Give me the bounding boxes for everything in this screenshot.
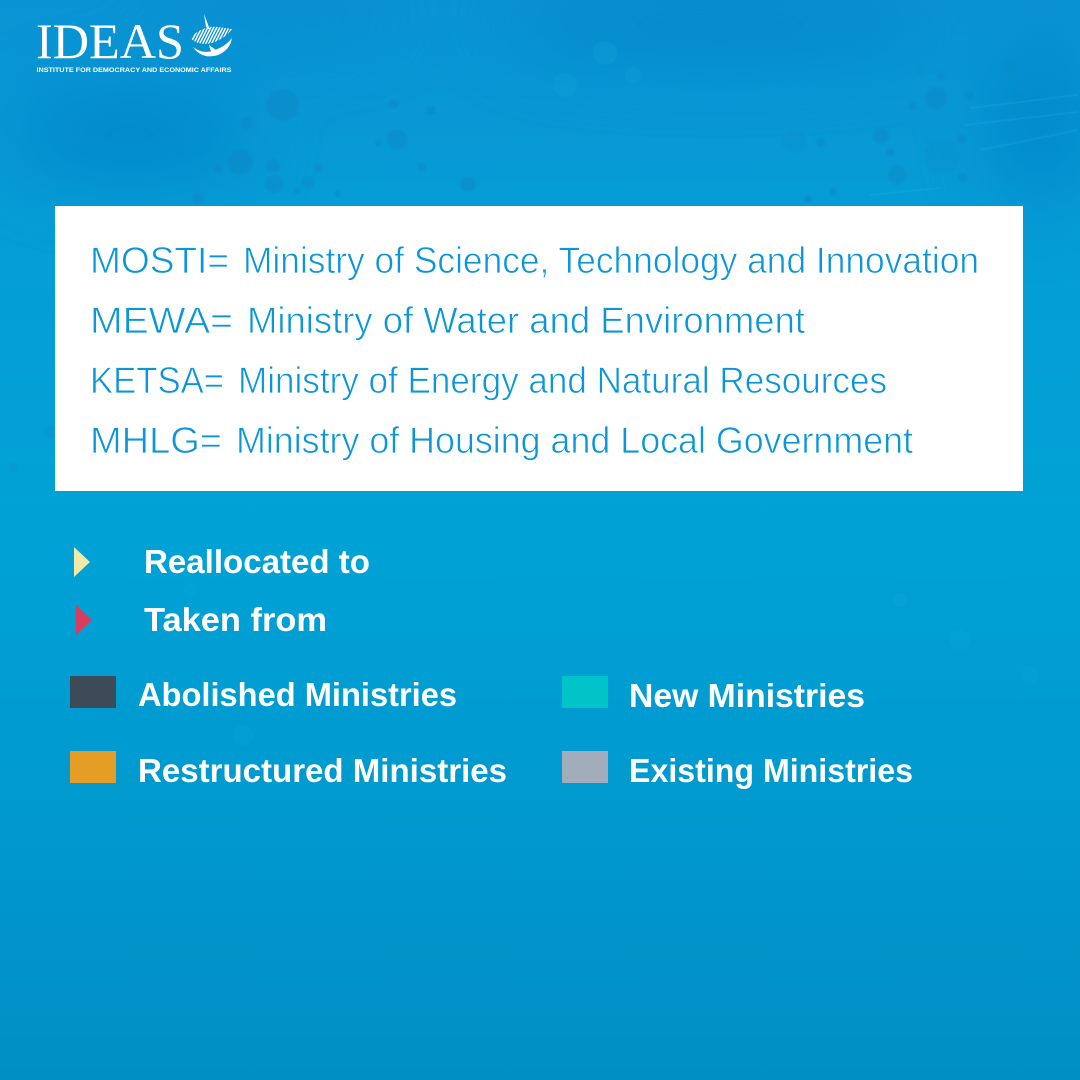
legend: abolished ministries: Abolished Ministries (138, 676, 457, 713)
abbreviation: MHLG: MHLG= (90, 420, 222, 461)
abbreviation: MOSTI: Ministry of Science, Technology and Innovation (243, 240, 979, 281)
legend: taken from (76, 601, 327, 638)
abbreviation: KETSA: Ministry of Energy and Natural Resources (238, 360, 887, 401)
legend: taken from: Taken from (144, 601, 327, 638)
logo wordmark: IDEAS (36, 13, 184, 69)
panel: abbreviations (55, 206, 1023, 491)
legend: new ministries: New Ministries (629, 677, 865, 714)
abbreviation: MHLG: Ministry of Housing and Local Government (236, 420, 914, 461)
legend: existing ministries: Existing Ministries (629, 752, 913, 789)
abbreviation: MEWA: Ministry of Water and Environment (247, 300, 806, 341)
logo tagline: INSTITUTE FOR DEMOCRACY AND ECONOMIC AFFAIRS (36, 67, 232, 74)
logo: IDEAS (36, 13, 234, 74)
abbreviation: MOSTI: MOSTI= (90, 240, 229, 281)
abbreviation: MEWA: MEWA= (90, 300, 233, 341)
legend: reallocated to: Reallocated to (144, 543, 370, 580)
icon: red arrow (76, 605, 92, 635)
abbreviation: KETSA: KETSA= (90, 360, 224, 401)
legend: restructured ministries: Restructured Ministries (138, 752, 507, 789)
logo emblem: bird (190, 14, 232, 56)
icon: pale yellow arrow (74, 547, 90, 577)
